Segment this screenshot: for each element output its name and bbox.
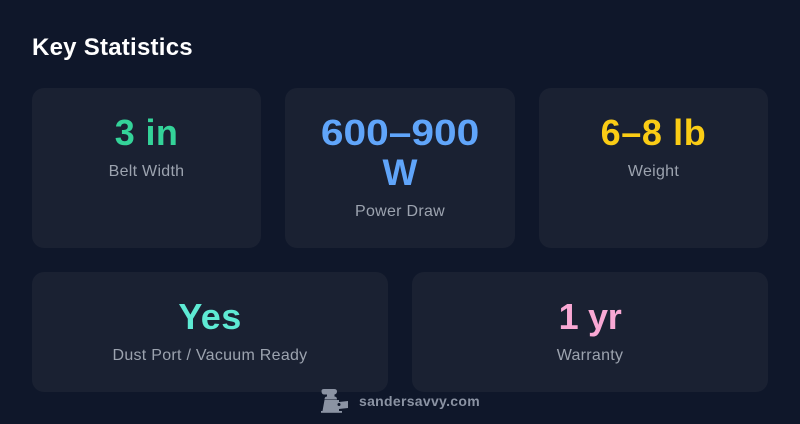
value: warranty: 1 yr (559, 296, 621, 337)
panel: power draw (285, 88, 515, 248)
label: belt width: Belt Width (109, 163, 184, 180)
value: power draw (321, 112, 479, 193)
label: dust port: Dust Port / Vacuum Ready (113, 347, 307, 364)
value: power draw: W (383, 152, 417, 193)
label: weight: Weight (628, 163, 679, 180)
value: dust port: Yes (178, 296, 242, 337)
value: belt width: 3 in (115, 112, 178, 153)
label: power draw: Power Draw (355, 203, 445, 220)
panel: weight (539, 88, 768, 248)
value: weight: 6–8 lb (601, 112, 706, 153)
icon: sander logo (321, 389, 348, 413)
watermark: sandersavvy.com (359, 393, 480, 409)
panel: dust port (32, 272, 388, 392)
panel: warranty (412, 272, 768, 392)
value: power draw: 600–900 (321, 112, 479, 153)
panel: belt width (32, 88, 261, 248)
label: warranty: Warranty (557, 347, 623, 364)
title: Key Statistics (32, 34, 193, 61)
